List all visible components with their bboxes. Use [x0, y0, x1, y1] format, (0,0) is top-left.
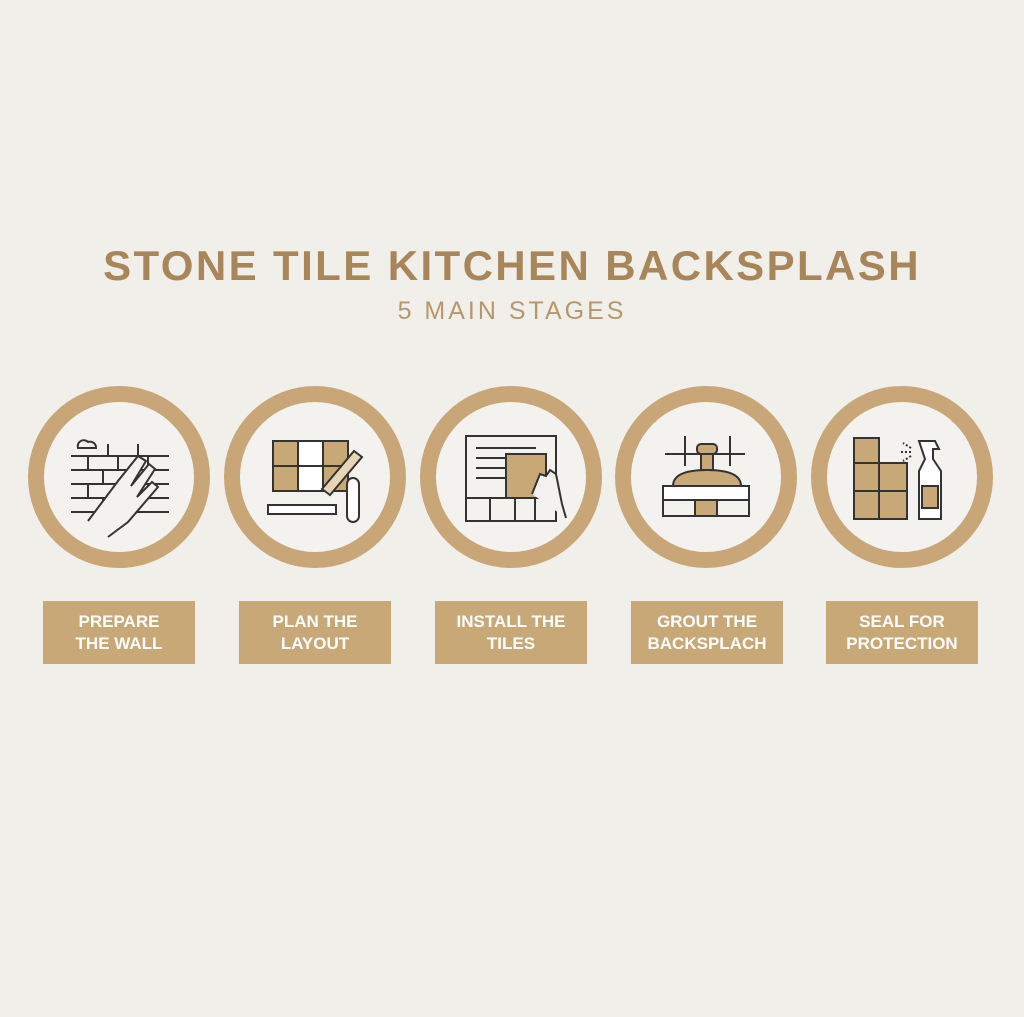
icon: seal [811, 386, 993, 568]
label: prepare the wall: THE WALL [76, 634, 162, 652]
label: plan the layout [239, 601, 391, 664]
subtitle: 5 MAIN STAGES [398, 297, 626, 325]
label: grout: BACKSPLACH [648, 634, 766, 652]
label: grout: GROUT THE [657, 612, 757, 630]
label: seal [826, 601, 978, 664]
label: install the tiles: TILES [487, 634, 535, 652]
label: prepare the wall [43, 601, 195, 664]
label: seal: SEAL FOR [859, 612, 945, 630]
label: plan the layout: LAYOUT [281, 634, 349, 652]
label: install the tiles: INSTALL THE [457, 612, 565, 630]
label: seal: PROTECTION [846, 634, 958, 652]
label: plan the layout: PLAN THE [272, 612, 358, 630]
icon: grout [615, 386, 797, 568]
label: prepare the wall: PREPARE [79, 612, 159, 630]
icon: install tiles [420, 386, 602, 568]
title: STONE TILE KITCHEN BACKSPLASH [103, 242, 921, 289]
icon: prepare the wall [28, 386, 210, 568]
label: install the tiles [435, 601, 587, 664]
label: grout [631, 601, 783, 664]
icon: plan the layout [224, 386, 406, 568]
